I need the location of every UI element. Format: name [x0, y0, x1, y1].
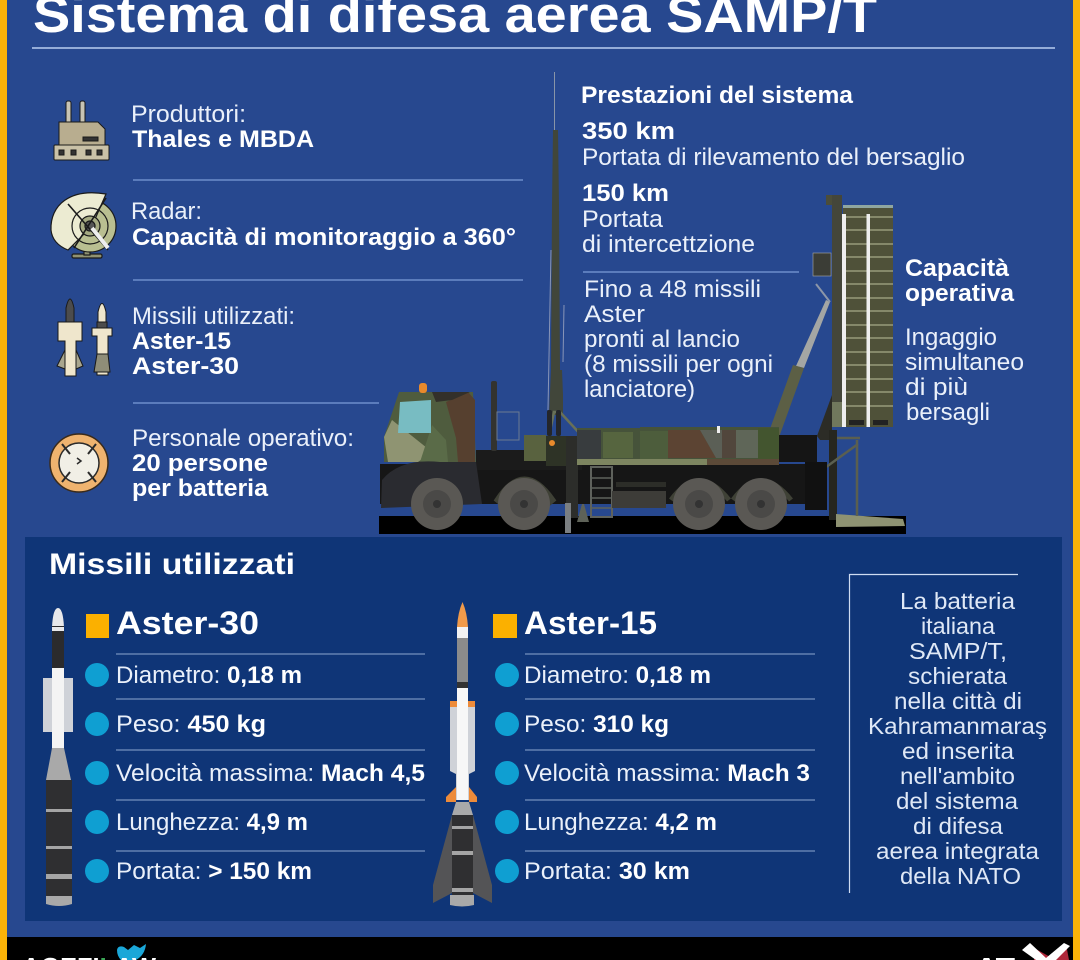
missiles text: Aster-30	[132, 353, 239, 380]
Aster-30 specs: Peso: 450 kg	[116, 711, 266, 738]
factory text	[131, 101, 314, 153]
Aster-15 heading: Aster-15	[524, 605, 657, 641]
callout: Italian battery: di difesa	[913, 813, 1004, 839]
callout: Italian battery: aerea integrata	[876, 838, 1040, 864]
Aster-30 heading: Aster-30	[116, 605, 259, 641]
Aster-15 specs: Lunghezza: 4,2 m	[524, 809, 717, 836]
callout: Italian battery: della NATO	[900, 863, 1021, 889]
panel: system facts	[50, 101, 523, 502]
heading: Missili utilizzati	[49, 548, 295, 581]
panel: operational capacity: simultaneo	[905, 349, 1024, 376]
missiles text: Missili utilizzati:	[132, 303, 295, 330]
missile capacity	[584, 276, 773, 403]
Aster-30 specs: Diametro: 0,18 m	[116, 662, 302, 689]
panel: operational capacity: Ingaggio	[905, 324, 997, 351]
chassis	[380, 435, 827, 533]
personnel text: 20 persone	[132, 450, 268, 477]
callout: Italian battery: del sistema	[896, 788, 1019, 814]
personnel text: Personale operativo:	[132, 425, 354, 452]
cab	[381, 381, 519, 508]
personnel text	[132, 425, 354, 502]
panel: missiles used	[25, 537, 1062, 921]
callout: Italian battery: nella città di	[894, 688, 1022, 714]
callout: Italian battery	[850, 574, 1047, 893]
callout: Italian battery: schierata	[908, 663, 1008, 689]
icon: factory	[54, 101, 109, 160]
wheels	[411, 478, 791, 530]
missile capacity: Aster	[584, 301, 645, 328]
launcher	[766, 195, 905, 527]
interception range: 150 km	[582, 180, 669, 207]
callout: Italian battery: La batteria	[900, 588, 1016, 614]
callout: Italian battery: italiana	[921, 613, 996, 639]
panel: system performance	[581, 82, 965, 403]
Aster-15 specs: Diametro: 0,18 m	[524, 662, 711, 689]
panel: operational capacity: di più	[905, 374, 968, 401]
panel: operational capacity	[905, 255, 1024, 426]
load box	[577, 426, 779, 465]
mast	[547, 72, 582, 436]
missile capacity: pronti al lancio	[584, 326, 740, 353]
radar text	[131, 198, 516, 251]
callout: Italian battery: nell'ambito	[900, 763, 1015, 789]
icon: radar	[51, 193, 116, 258]
callout: Italian battery: SAMP/T,	[909, 638, 1007, 664]
personnel text: per batteria	[132, 475, 269, 502]
logo: right	[975, 943, 1070, 960]
left yellow border	[0, 0, 7, 960]
factory text: Thales e MBDA	[132, 126, 314, 153]
radar text: Radar:	[131, 198, 202, 225]
detection range	[582, 118, 965, 171]
heading: Prestazioni del sistema	[581, 82, 854, 109]
illustration: Aster-30	[43, 608, 73, 906]
detection range: Portata di rilevamento del bersaglio	[582, 144, 965, 171]
Aster-30 specs: Velocità massima: Mach 4,5	[116, 760, 425, 787]
icon: missiles	[57, 299, 112, 376]
panel: operational capacity: operativa	[905, 280, 1015, 307]
missile capacity: lanciatore)	[584, 376, 695, 403]
missile capacity: Fino a 48 missili	[584, 276, 761, 303]
ground shadow	[379, 516, 906, 534]
panel: operational capacity: Capacità	[905, 255, 1010, 282]
callout: Italian battery: Kahramanmaraş	[868, 713, 1047, 739]
interception range	[582, 180, 755, 258]
Aster-30 specs: Portata: > 150 km	[116, 858, 312, 885]
callout: Italian battery: ed inserita	[902, 738, 1015, 764]
logo: left	[22, 944, 156, 960]
panel: operational capacity: bersagli	[906, 399, 990, 426]
detection range: 350 km	[582, 118, 675, 145]
missile capacity: (8 missili per ogni	[584, 351, 773, 378]
icon: personnel	[50, 434, 108, 492]
missiles text: Aster-15	[132, 328, 231, 355]
factory text: Produttori:	[131, 101, 246, 128]
Aster-30 specs	[85, 654, 425, 885]
interception range: di intercettzione	[582, 231, 755, 258]
illustration: Aster-15	[433, 602, 492, 906]
Aster-30 specs: Lunghezza: 4,9 m	[116, 809, 308, 836]
Aster-15 specs: Portata: 30 km	[524, 858, 690, 885]
footer bar	[7, 937, 1073, 960]
radar text: Capacità di monitoraggio a 360°	[132, 224, 516, 251]
truck illustration	[379, 72, 906, 534]
Aster-15 specs: Peso: 310 kg	[524, 711, 669, 738]
missiles text	[132, 303, 295, 380]
interception range: Portata	[582, 206, 664, 233]
right yellow border	[1073, 0, 1080, 960]
Aster-15 specs	[495, 654, 815, 885]
Aster-15 specs: Velocità massima: Mach 3	[524, 760, 810, 787]
